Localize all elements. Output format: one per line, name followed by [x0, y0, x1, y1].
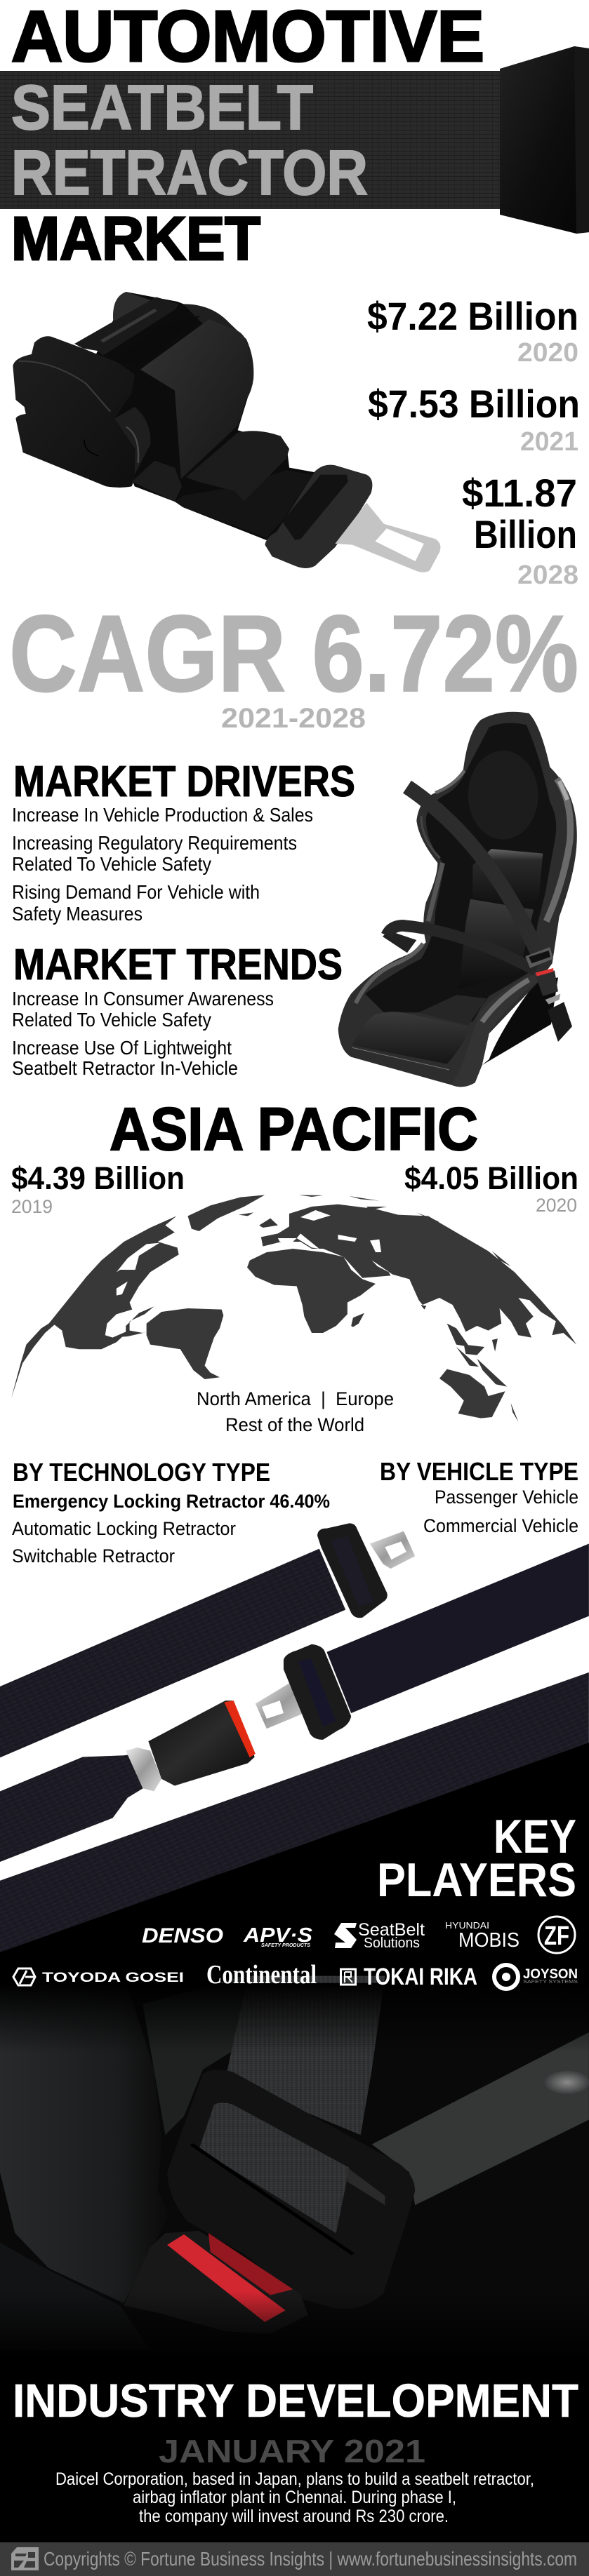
value: 2028: $11.87	[462, 471, 577, 515]
value: 2021	[368, 382, 580, 457]
photo fade top	[0, 1983, 589, 2053]
value: 2020: 2020	[517, 338, 578, 368]
value: 2020: $4.05 Billion	[404, 1160, 578, 1196]
icon: retractor housing	[500, 46, 589, 234]
development description	[55, 2469, 534, 2526]
other regions list: Rest of the World	[225, 1414, 364, 1435]
technology item: emergency locking retractor: Emergency Locking Retractor 46.40%	[13, 1491, 330, 1512]
vehicle item: commercial: Commercial Vehicle	[423, 1515, 578, 1536]
heading: key players: KEY	[494, 1810, 576, 1863]
photo: right strap	[372, 2032, 589, 2205]
shoulder belt	[407, 787, 538, 954]
value: 2020: 2020	[536, 1195, 577, 1216]
seat rear support	[482, 977, 558, 1065]
logo: Denso: DENSO	[142, 1924, 223, 1947]
trend 2	[12, 1037, 238, 1079]
title block	[0, 0, 589, 273]
value: 2019: $4.39 Billion	[11, 1160, 185, 1196]
photo: seat leather	[0, 1985, 169, 2303]
Africa	[247, 1249, 376, 1333]
value: 2021: 2021	[520, 427, 578, 457]
section: segmentation	[12, 1457, 578, 1567]
technology item: automatic locking retractor: Automatic Locking Retractor	[12, 1518, 236, 1539]
logo: Joyson: SAFETY SYSTEMS	[523, 1980, 578, 1985]
seat shell	[338, 712, 577, 1087]
development description: the company will invest around Rs 230 crore.	[139, 2507, 449, 2526]
title line: RETRACTOR: RETRACTOR	[11, 138, 368, 208]
Greenland	[187, 1195, 265, 1231]
map water details	[117, 1210, 381, 1296]
belt buckle	[525, 947, 572, 1042]
title band: seatbelt webbing	[0, 71, 501, 209]
photo: shoulder strap	[225, 1976, 385, 2135]
photo: red release button	[167, 2233, 293, 2322]
seat inner	[365, 723, 556, 1022]
value: 2019	[11, 1160, 185, 1217]
technology item: switchable retractor: Switchable Retractor	[12, 1545, 175, 1567]
title line: SEATBELT: SEATBELT	[11, 73, 313, 143]
lap belt	[383, 925, 536, 970]
belt strap 3	[0, 1672, 589, 1952]
New Zealand	[511, 1403, 518, 1422]
CAGR headline: 2021-2028	[221, 703, 366, 734]
value: 2019: 2019	[11, 1196, 53, 1217]
market size values	[367, 294, 580, 590]
logo: APV-S: SAFETY PRODUCTS	[261, 1943, 310, 1948]
belt strap 1	[0, 1549, 345, 1757]
heading: ASIA PACIFIC: ASIA PACIFIC	[110, 1096, 478, 1163]
logo: Hyundai Mobis: MOBIS	[458, 1929, 519, 1952]
logo: APV-S: APV·S	[243, 1924, 313, 1947]
Arctic islands	[298, 1195, 511, 1266]
regional values	[11, 1160, 578, 1217]
development description: airbag inflator plant in Chennai. During phase I,	[133, 2488, 456, 2507]
logo: Continental: Continental	[206, 1960, 317, 1990]
Australia	[439, 1369, 505, 1418]
section: industry development	[13, 2375, 578, 2526]
seat rear cushion	[419, 995, 487, 1026]
footer	[0, 2542, 589, 2576]
panel: dark key players background	[0, 1743, 589, 2576]
Madagascar	[351, 1313, 364, 1327]
logo: Hyundai Mobis: HYUNDAI	[445, 1920, 489, 1931]
driver 1: Increase In Vehicle Production & Sales	[12, 804, 313, 826]
heading: MARKET DRIVERS: MARKET DRIVERS	[13, 758, 355, 806]
photo fade bottom	[0, 2292, 589, 2362]
icon: Fortune Business Insights logo	[11, 2547, 39, 2570]
seat rim highlights	[356, 770, 571, 1003]
footer bar	[0, 2542, 589, 2576]
photo: latch plate	[167, 2070, 415, 2309]
other regions list	[197, 1388, 394, 1435]
lower back panel	[458, 899, 534, 989]
value: 2020	[404, 1160, 578, 1216]
heading: by technology type: BY TECHNOLOGY TYPE	[13, 1458, 270, 1487]
buckle body with red release	[126, 1700, 256, 1792]
British Isles	[259, 1219, 278, 1228]
logo: Toyoda Gosei	[13, 1968, 184, 1985]
logo: ZF	[538, 1917, 575, 1953]
section: market drivers	[12, 758, 355, 925]
logo: Joyson	[494, 1965, 578, 1989]
driver 2: Increasing Regulatory Requirements	[12, 832, 297, 854]
trend 1: Increase In Consumer Awareness	[12, 988, 274, 1009]
logo: Tokai Rika: TOKAI RIKA	[364, 1964, 477, 1990]
right bolster	[451, 973, 543, 1087]
photo: lower seat	[0, 2243, 150, 2350]
driver 2: Related To Vehicle Safety	[12, 853, 211, 875]
photo: buckle housing	[124, 2231, 308, 2334]
value: 2028	[462, 471, 578, 590]
tongue latch plate	[256, 1644, 351, 1740]
photo: base	[0, 1985, 589, 2383]
logo: SeatBelt Solutions: Solutions	[364, 1936, 420, 1951]
heading: key players	[377, 1810, 576, 1907]
development description: Daicel Corporation, based in Japan, plans to build a seatbelt retractor,	[55, 2469, 534, 2489]
section: market trends	[12, 941, 343, 1079]
North America	[11, 1216, 179, 1398]
vehicle item: passenger: Passenger Vehicle	[435, 1487, 578, 1508]
seat back panel	[468, 751, 538, 840]
Iceland	[239, 1212, 253, 1216]
photo: seatbelt buckle	[0, 1976, 589, 2384]
driver 3	[12, 881, 260, 925]
illustration: seatbelt retractor with tongue	[13, 292, 440, 572]
belt strap left	[0, 1754, 148, 1862]
illustration: seatbelt straps and buckle	[0, 1523, 589, 1952]
logo: SeatBelt Solutions: SeatBelt	[358, 1920, 425, 1940]
trend 2: Increase Use Of Lightweight	[12, 1037, 232, 1059]
trend 1: Related To Vehicle Safety	[12, 1009, 211, 1031]
logo: Hyundai Mobis	[445, 1920, 519, 1952]
value: 2020	[367, 294, 578, 368]
seat cushion	[352, 1012, 468, 1064]
logo: Joyson: JOYSON	[523, 1967, 578, 1982]
title line: MARKET: MARKET	[11, 205, 260, 273]
logo: ZF: ZF	[544, 1921, 569, 1951]
Central America	[112, 1306, 154, 1338]
driver 3: Rising Demand For Vehicle with	[12, 881, 260, 903]
driver 2	[12, 832, 297, 875]
trend 2: Seatbelt Retractor In-Vehicle	[12, 1057, 238, 1079]
other regions list: North America | Europe	[197, 1388, 394, 1409]
photo: bolt	[545, 2071, 589, 2094]
driver 3: Safety Measures	[12, 903, 143, 925]
trend 1	[12, 988, 274, 1031]
lumbar panel	[472, 849, 543, 905]
belt strap 2	[326, 1543, 589, 1713]
logos: key players	[13, 1917, 578, 1990]
world map	[11, 1195, 576, 1422]
photo: strap through slot	[199, 2102, 350, 2233]
illustration: racing seat with belt	[338, 712, 577, 1087]
photo: back panel	[143, 1976, 244, 2135]
logo: SeatBelt Solutions	[334, 1920, 425, 1951]
Maritime southeast Asia	[421, 1305, 507, 1387]
buckle latch plate upper	[317, 1523, 415, 1618]
heading: MARKET TRENDS: MARKET TRENDS	[13, 941, 343, 989]
logo: Toyoda Gosei: TOYODA GOSEI	[42, 1971, 184, 1985]
Eurasia	[261, 1205, 576, 1345]
value: 2028: 2028	[517, 561, 578, 590]
South America	[147, 1308, 223, 1379]
date: January 2021: JANUARY 2021	[159, 2433, 425, 2469]
